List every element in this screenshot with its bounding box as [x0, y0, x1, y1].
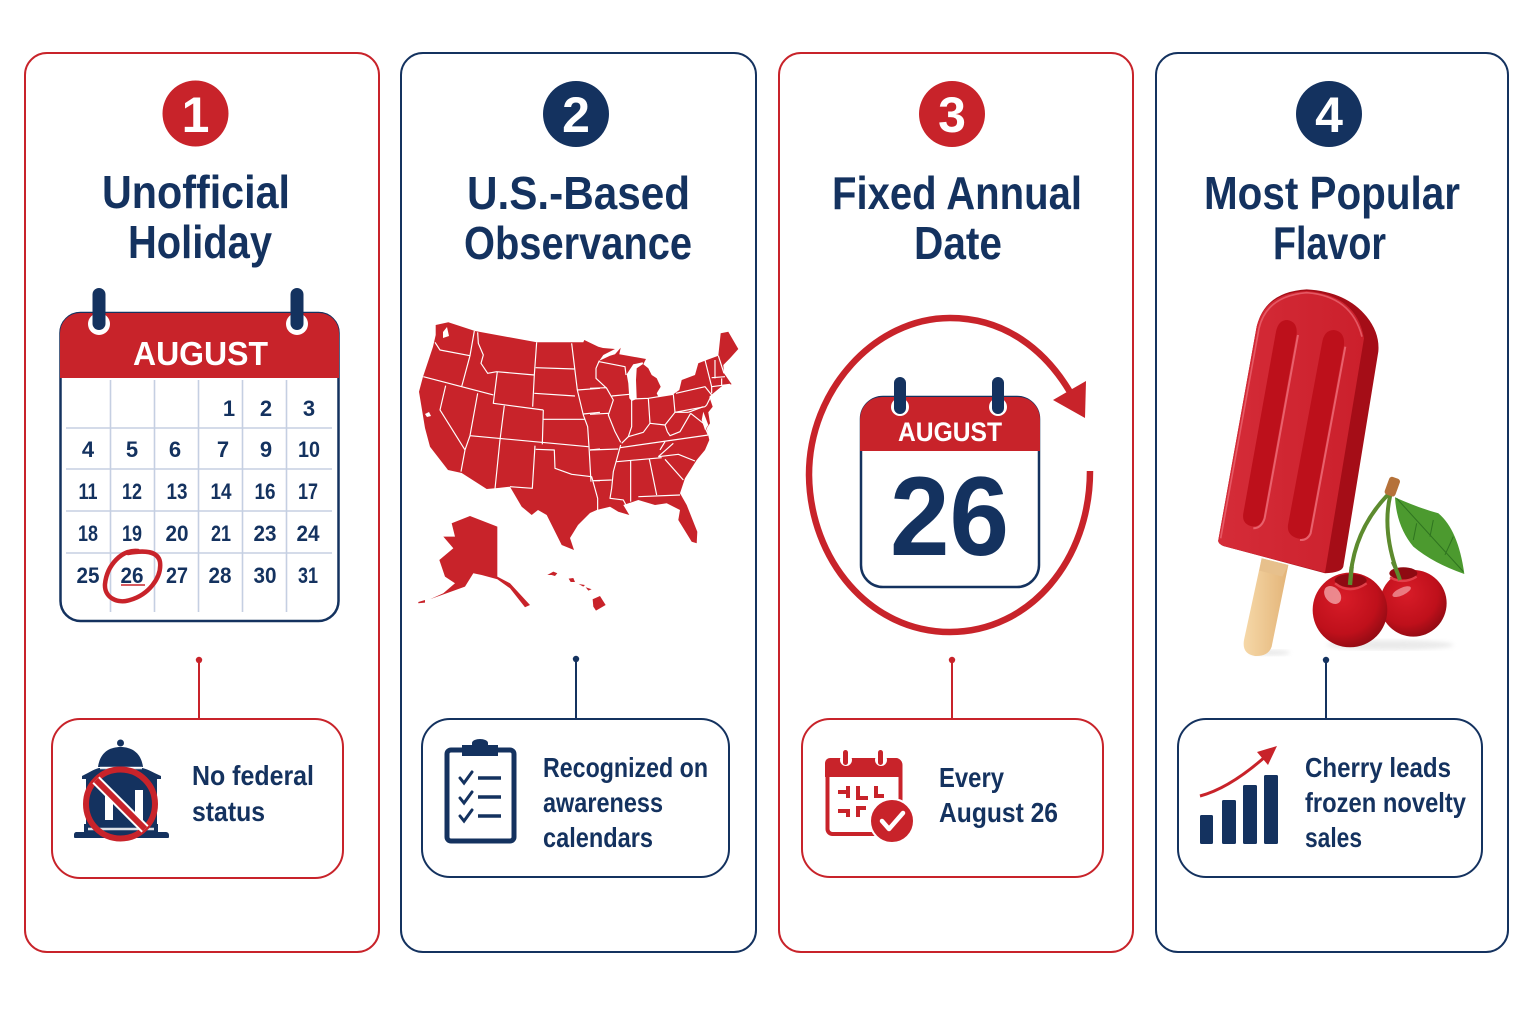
calendar: August with 26 circled: 9 — [260, 437, 272, 462]
heading: Most Popular Flavor: Most Popular — [1204, 167, 1460, 219]
heading: U.S.-Based Observance: U.S.-Based — [467, 167, 690, 219]
calendar: August with 26 circled: 24 — [296, 521, 320, 546]
panel frame 3 — [779, 53, 1133, 952]
connector 1 — [196, 657, 202, 719]
icon: calendar with check — [825, 750, 914, 843]
calendar: August with 26 circled: 18 — [78, 521, 98, 546]
calendar: August with 26 circled: 11 — [78, 479, 98, 504]
number badge 1 — [162, 80, 228, 146]
icon: crossed-out government building — [74, 740, 169, 838]
calendar: August 26 — [860, 377, 1040, 587]
number badge 4: 4 — [1315, 87, 1343, 143]
panel frame 4 — [1156, 53, 1508, 952]
heading: Fixed Annual Date — [832, 167, 1082, 269]
panel frame 2 — [401, 53, 756, 952]
connector 3 — [949, 657, 955, 719]
calendar: August with 26 circled: 27 — [166, 563, 188, 588]
heading: Unofficial Holiday: Unofficial — [102, 166, 290, 218]
icon: circular arrow around calendar — [809, 318, 1090, 632]
calendar: August with 26 circled: 25 — [76, 563, 100, 588]
number badge 3 — [919, 81, 985, 147]
calendar: August with 26 circled: 26 — [120, 563, 144, 588]
heading: Unofficial Holiday — [102, 166, 290, 268]
callout text: calendars — [543, 822, 653, 853]
callout text: No federal — [192, 760, 314, 791]
calendar: August with 26 circled: 2 — [260, 396, 272, 421]
calendar: August with 26 circled: 4 — [82, 437, 95, 462]
callout text: August 26 — [939, 797, 1058, 828]
calendar: August with 26 circled: 3 — [303, 396, 315, 421]
calendar: August with 26 circled: 21 — [211, 521, 231, 546]
heading: U.S.-Based Observance: Observance — [464, 217, 692, 269]
panel: fixed annual date — [779, 53, 1133, 952]
icon: rising bar chart — [1200, 746, 1278, 844]
map: United States — [418, 322, 738, 611]
heading: Most Popular Flavor: Flavor — [1273, 217, 1386, 269]
number badge 1: 1 — [182, 87, 209, 143]
number badge 2: 2 — [562, 87, 590, 143]
calendar: August with 26 circled: 31 — [298, 563, 318, 588]
connector 2 — [573, 656, 579, 719]
calendar: August with 26 circled: 14 — [210, 479, 232, 504]
heading: Unofficial Holiday: Holiday — [128, 216, 272, 268]
panel: U.S.-based observance — [401, 53, 756, 952]
callout text — [939, 762, 1058, 828]
callout text: frozen novelty — [1305, 787, 1466, 818]
calendar: August with 26 circled: 17 — [298, 479, 318, 504]
panel: most popular flavor — [1156, 53, 1508, 952]
callout text — [1305, 752, 1466, 853]
heading: U.S.-Based Observance — [464, 167, 692, 269]
callout text: sales — [1305, 822, 1362, 853]
calendar: August with 26 circled: 6 — [169, 437, 181, 462]
calendar: August with 26 circled: 23 — [254, 521, 276, 546]
callout text: status — [192, 796, 265, 827]
callout: cherry leads frozen novelty sales — [1178, 719, 1482, 877]
heading: Fixed Annual Date: Date — [914, 217, 1002, 269]
calendar: August with 26 circled: 19 — [122, 521, 142, 546]
callout: every August 26 — [802, 719, 1103, 877]
callout text: Recognized on — [543, 752, 708, 783]
lakes and bays — [425, 327, 708, 430]
illustration: cherry popsicle and cherries — [1218, 289, 1464, 656]
callout text: awareness — [543, 787, 663, 818]
number badge 2 — [543, 81, 609, 147]
callout: no federal status — [52, 719, 343, 878]
calendar: August with 26 circled: 16 — [254, 479, 276, 504]
callout text: Cherry leads — [1305, 752, 1451, 783]
heading: Fixed Annual Date: Fixed Annual — [832, 167, 1082, 219]
calendar: August with 26 circled: 12 — [122, 479, 142, 504]
calendar: August with 26 circled: 13 — [166, 479, 188, 504]
heading: Most Popular Flavor — [1204, 167, 1460, 269]
calendar: August with 26 circled: 10 — [298, 437, 320, 462]
icon: clipboard checklist — [447, 740, 514, 841]
panel frame 1 — [25, 53, 379, 952]
connector 4 — [1323, 657, 1329, 719]
callout: recognized on awareness calendars — [422, 719, 729, 877]
calendar: August with 26 circled — [60, 288, 339, 621]
calendar: August with 26 circled: 28 — [208, 563, 232, 588]
number badge 3: 3 — [938, 87, 966, 143]
calendar: August with 26 circled: 20 — [166, 521, 188, 546]
callout text — [543, 752, 708, 853]
panel: unofficial holiday — [25, 53, 379, 952]
calendar: August 26: AUGUST — [898, 417, 1002, 447]
calendar: August with 26 circled: 5 — [126, 437, 138, 462]
number badge 4 — [1296, 81, 1362, 147]
callout text: Every — [939, 762, 1004, 793]
calendar: August 26: 26 — [890, 454, 1009, 579]
calendar: August with 26 circled: 7 — [217, 437, 229, 462]
calendar: August with 26 circled: 1 — [223, 396, 235, 421]
callout text — [192, 760, 314, 827]
calendar: August with 26 circled: AUGUST — [133, 335, 268, 372]
calendar: August with 26 circled: 30 — [254, 563, 276, 588]
